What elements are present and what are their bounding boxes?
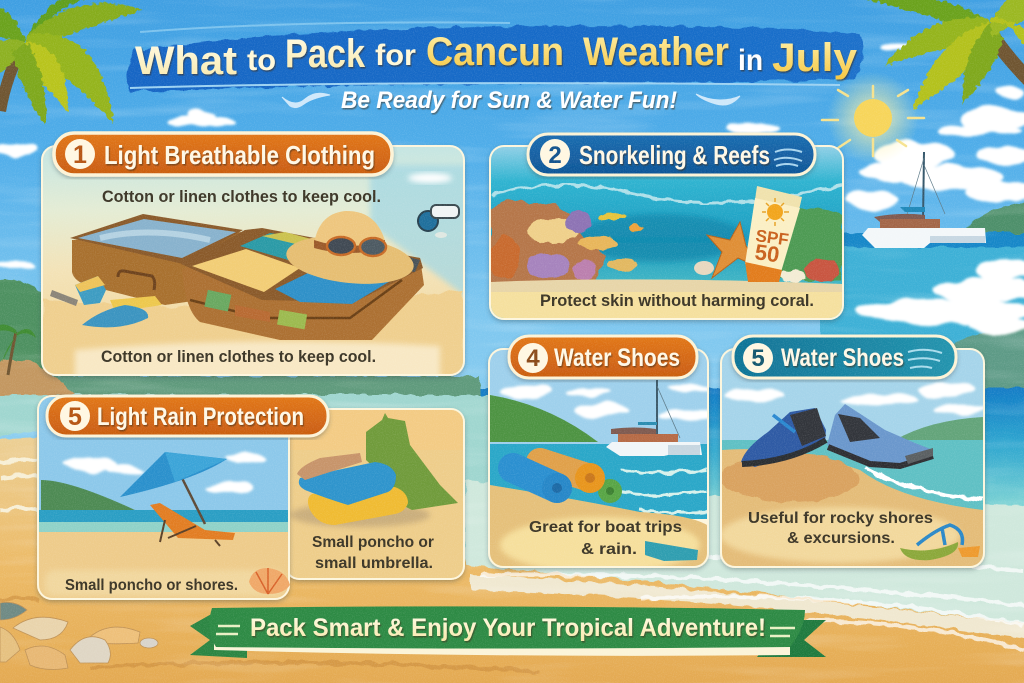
beach items [50,276,162,327]
icon: seashell [249,568,290,594]
panel 1 bottom caption: Cotton or linen clothes to keep cool. [101,348,376,366]
title text: for [375,39,416,72]
suitcase lid [70,214,243,305]
starfish [706,220,748,280]
panel 4 caption: & rain. [581,541,637,558]
panel 5 caption [748,510,933,547]
icon: catamaran [862,152,986,248]
panel 5 heading: Water Shoes [781,344,904,372]
panel 3 right caption: small umbrella. [315,555,433,572]
panel: 2 header [528,134,815,175]
panel: 1 header: 1 [73,141,87,169]
icon: right palm tree [840,0,1024,110]
panel 5 caption: Useful for rocky shores [748,510,933,527]
panel: 2 snorkeling and reefs [489,145,844,320]
panel: 1 light breathable clothing [41,145,470,380]
title text: Weather [583,30,729,74]
title text: to [247,44,276,77]
subtitle text: Be Ready for Sun & Water Fun! [341,87,677,114]
panel 1 heading: Light Breathable Clothing [104,140,375,170]
title text: July [772,36,858,80]
panel: 3 left sub-panel beach [37,395,290,602]
towel stack [297,453,408,525]
panel 2 heading: Snorkeling & Reefs [579,140,770,170]
panel: 3 header [47,396,328,436]
icon: left palm tree [0,0,142,126]
title text: What [135,39,237,83]
sunscreen tube SPF 50: 50 [753,239,781,267]
sunscreen tube SPF 50 [745,186,802,282]
panel 3 left caption: Small poncho or shores. [65,577,238,594]
catamaran [606,380,702,456]
panel 4 heading: Water Shoes [554,344,680,372]
panel 2 caption: Protect skin without harming coral. [540,292,814,310]
icon: snorkel goggles [418,205,459,238]
panel 4 caption [529,519,682,558]
suitcase base with clothes [181,228,424,340]
green poncho bag [366,413,458,510]
footer banner [190,606,826,658]
panel: 3 header: 5 [68,403,82,431]
rolled towels [513,462,622,503]
title text: Pack [285,32,366,76]
panel: 3 right sub-panel towels [285,408,465,580]
coral reef [490,200,643,285]
panel 1 top caption: Cotton or linen clothes to keep cool. [102,188,381,206]
icon: teal tag [645,541,698,561]
panel 3 right caption: Small poncho or [312,534,434,551]
beach chair [150,503,235,546]
icon: sun [822,72,924,164]
panel: 5 header [733,336,956,378]
footer text: Pack Smart & Enjoy Your Tropical Adventure! [250,614,766,642]
icon: flip-flop and sponge [900,525,980,560]
panel 3 heading: Light Rain Protection [97,403,304,431]
panel: 2 header: 2 [548,142,562,169]
panel: 4 header [509,336,697,378]
plants [779,208,842,282]
beach umbrella [120,452,227,524]
title text: Cancun [426,30,564,74]
sunscreen tube SPF 50: SPF [754,226,790,250]
icon: seashells on sand [0,602,158,669]
panel: 4 header: 4 [526,345,540,372]
panel 3 right caption [312,534,434,572]
title banner [127,22,863,92]
clouds [0,42,1024,333]
panel: 4 boat trips [488,348,713,573]
panel: 5 water shoes [720,348,985,568]
panel 4 caption: Great for boat trips [529,519,682,536]
panel: 1 header [54,133,392,175]
subtitle [282,87,740,114]
panel 5 caption: & excursions. [787,530,895,547]
title text [135,30,858,83]
panel: 5 header: 5 [751,345,765,372]
left water shoe [741,408,826,467]
straw hat with sunglasses [286,211,414,284]
icon: small palm on left hill [0,324,36,375]
title text: in [738,44,763,77]
right water shoe [827,404,933,466]
